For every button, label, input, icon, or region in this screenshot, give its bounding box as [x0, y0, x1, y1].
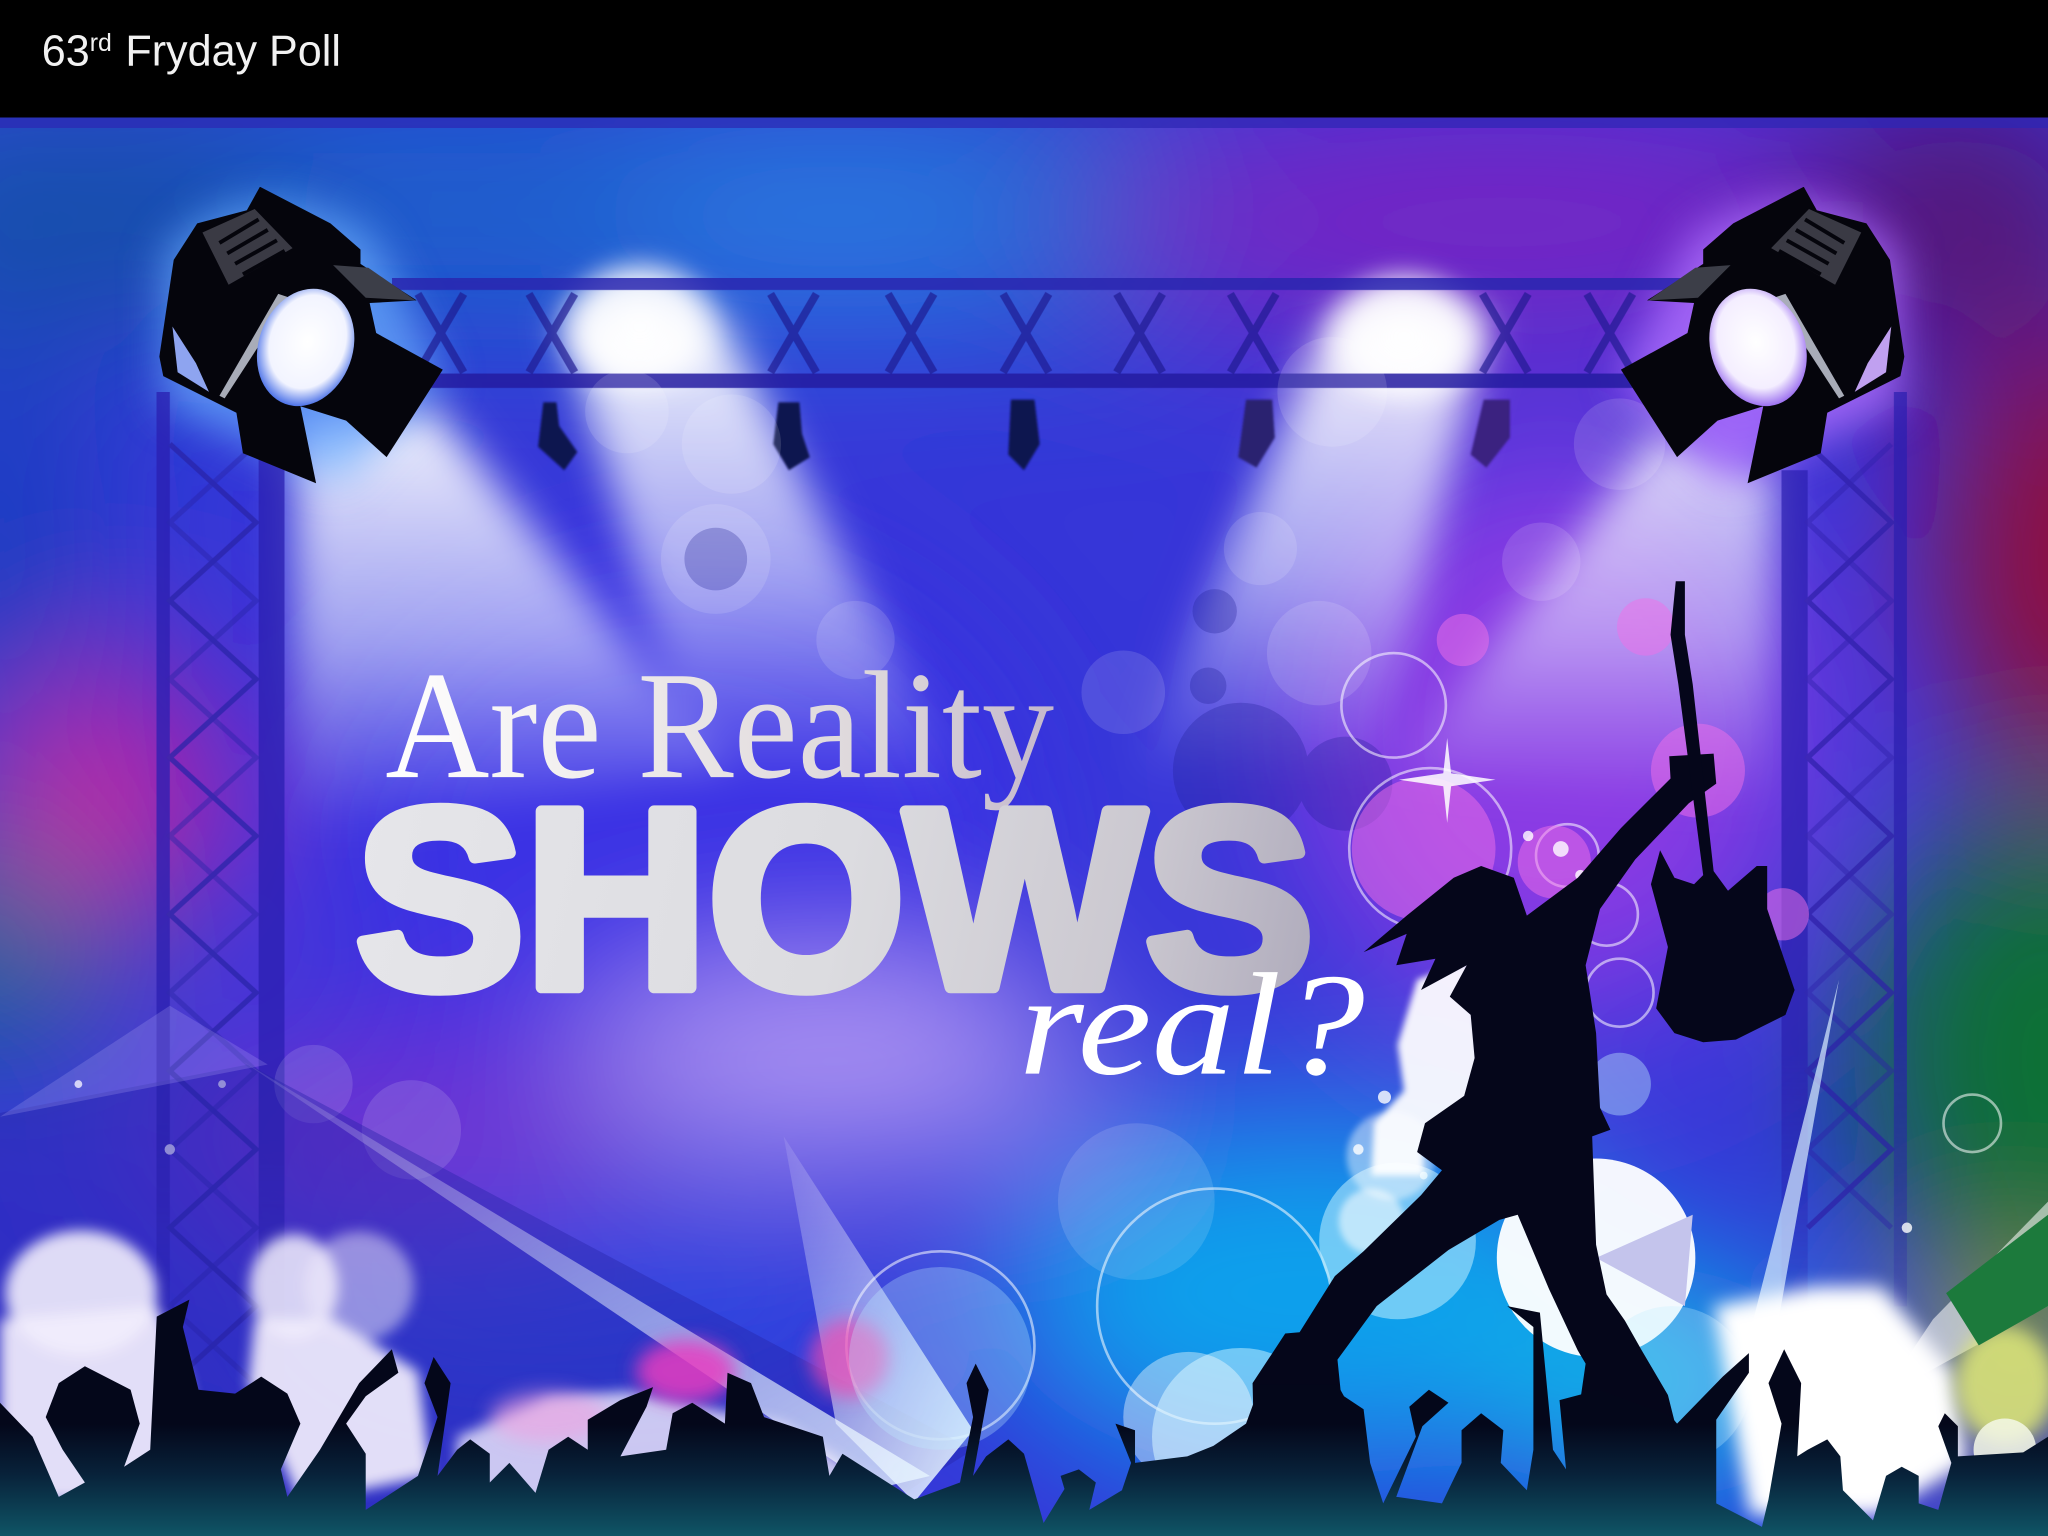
blue discs [849, 1053, 1750, 1526]
header bar [0, 0, 2048, 119]
handle highlight [172, 327, 209, 392]
handle highlight right [1855, 327, 1891, 392]
vent lines [219, 219, 285, 274]
door edge highlight [219, 294, 290, 398]
flare: left lamp [551, 251, 729, 402]
lens right [1693, 275, 1823, 420]
bokeh circles [74, 337, 2001, 1439]
barn door plate right [1648, 265, 1731, 300]
spotlight: right [1621, 187, 1904, 483]
sparkle star [1399, 738, 1496, 823]
vent lines right [1779, 219, 1844, 274]
title [355, 641, 1365, 1106]
light beams [294, 251, 1776, 836]
crowd silhouette [0, 1300, 2048, 1536]
lower-left light rays [0, 980, 2048, 1536]
door edge highlight right [1774, 294, 1844, 398]
title: SHOWS: SHOWS [355, 756, 1314, 1042]
lamp vents [202, 209, 293, 285]
spotlight halos [163, 200, 1900, 483]
guitar [1651, 581, 1795, 1042]
spotlight: left [159, 187, 443, 483]
lamp housing [159, 187, 443, 483]
small hanging lamps [538, 400, 1510, 470]
lamp vents right [1771, 209, 1861, 285]
lamp housing right [1621, 187, 1904, 483]
guitarist body [1253, 754, 1716, 1489]
guitarist silhouette [1253, 581, 1795, 1489]
header text: Fryday Poll [125, 27, 341, 75]
white cloud behind guitarist [1339, 960, 1482, 1254]
title: Are Reality: Are Reality [385, 641, 1054, 811]
bright clouds lower area [0, 960, 2048, 1526]
truss: right tower [1782, 392, 1907, 1306]
left white clouds [0, 1230, 914, 1509]
lens [241, 275, 370, 420]
truss: top beam [392, 278, 1685, 388]
barn door plate [333, 265, 415, 300]
header text: rd [90, 30, 112, 57]
right white flare [1714, 1287, 1966, 1515]
title: real?: real? [1019, 944, 1365, 1106]
truss: left tower [157, 392, 285, 1437]
header text: 63 [42, 27, 90, 75]
flare: right lamp [1315, 261, 1493, 413]
